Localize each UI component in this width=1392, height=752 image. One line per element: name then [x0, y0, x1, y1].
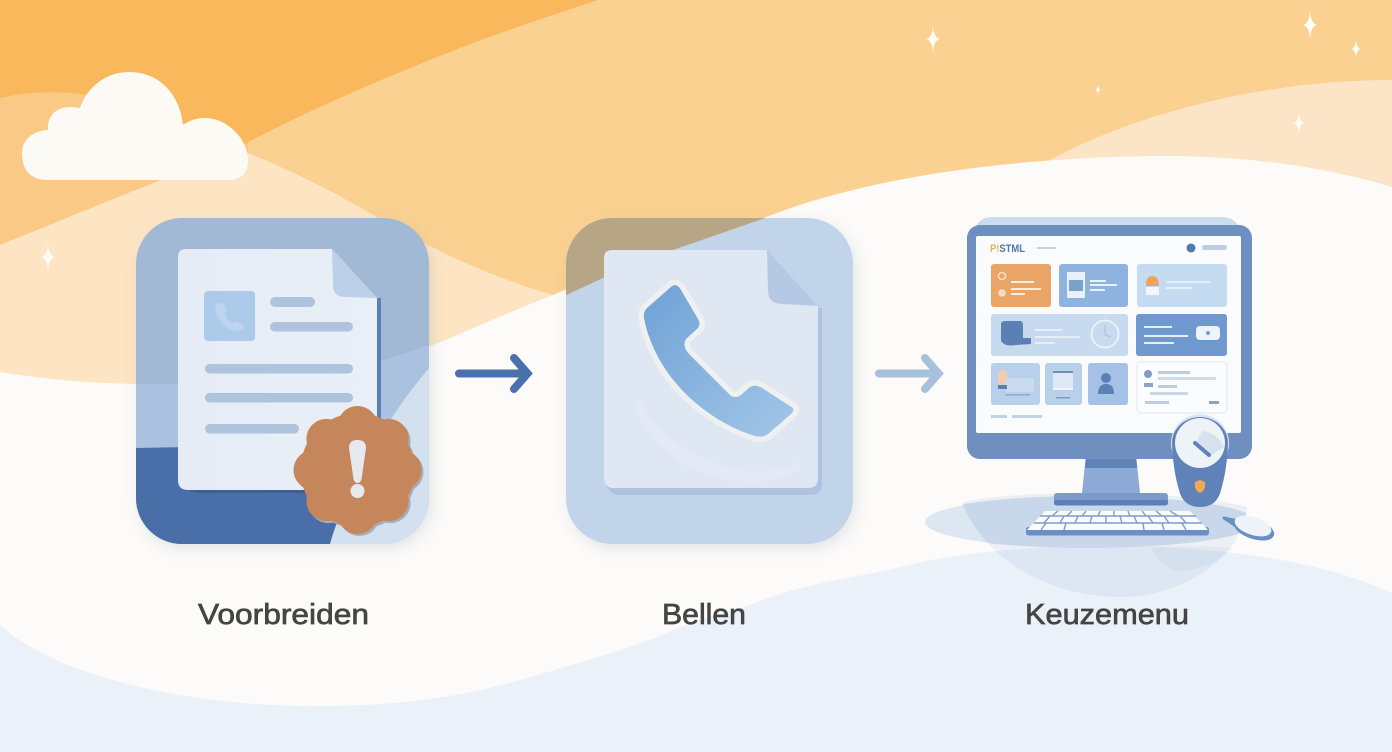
tile: person [1088, 363, 1128, 405]
arrow: step one to two [459, 358, 528, 389]
panel: bellen phone card [560, 210, 853, 544]
card background [560, 210, 853, 544]
icon: mouse [1224, 512, 1277, 545]
logo: P!STML [990, 243, 1025, 255]
document page [178, 249, 377, 490]
sparkles [41, 10, 1361, 271]
panel: voorbereiden document card [136, 218, 429, 544]
text lines [205, 297, 353, 434]
contact tile with phone [204, 291, 255, 341]
label: Bellen: Bellen [662, 599, 746, 631]
monitor frame [967, 225, 1252, 459]
tile: white list [1137, 362, 1227, 413]
tile: orange list [991, 264, 1051, 307]
faint sound arcs [636, 397, 800, 482]
warning badge [294, 406, 424, 536]
page fold [767, 250, 818, 306]
panel: keuzemenu computer [917, 217, 1277, 597]
document page [604, 250, 818, 488]
screen footer lines [991, 415, 1042, 418]
monitor back edge [975, 217, 1240, 228]
document shadow [606, 300, 822, 495]
icon: clock fob [1171, 414, 1229, 507]
tile: profile form [991, 363, 1040, 405]
tile: blue card [1136, 314, 1227, 356]
tile: wide chat and clock [991, 314, 1128, 356]
monitor stand [1054, 455, 1168, 506]
label: Keuzemenu: Keuzemenu [1025, 599, 1189, 631]
label: Voorbreiden: Voorbreiden [198, 599, 369, 631]
screen header [1037, 244, 1227, 252]
arrow: step two to three [879, 358, 938, 389]
page fold [332, 249, 377, 298]
desk shadow [917, 493, 1257, 597]
keyboard [1026, 511, 1209, 536]
tile: light bell [1137, 264, 1227, 307]
screen [976, 236, 1241, 433]
document shadow [190, 298, 381, 493]
icon: cloud [22, 72, 248, 180]
card background [136, 218, 429, 544]
tile: calendar [1045, 363, 1082, 405]
icon: phone handset [644, 285, 793, 437]
tile: blue document [1059, 264, 1128, 307]
